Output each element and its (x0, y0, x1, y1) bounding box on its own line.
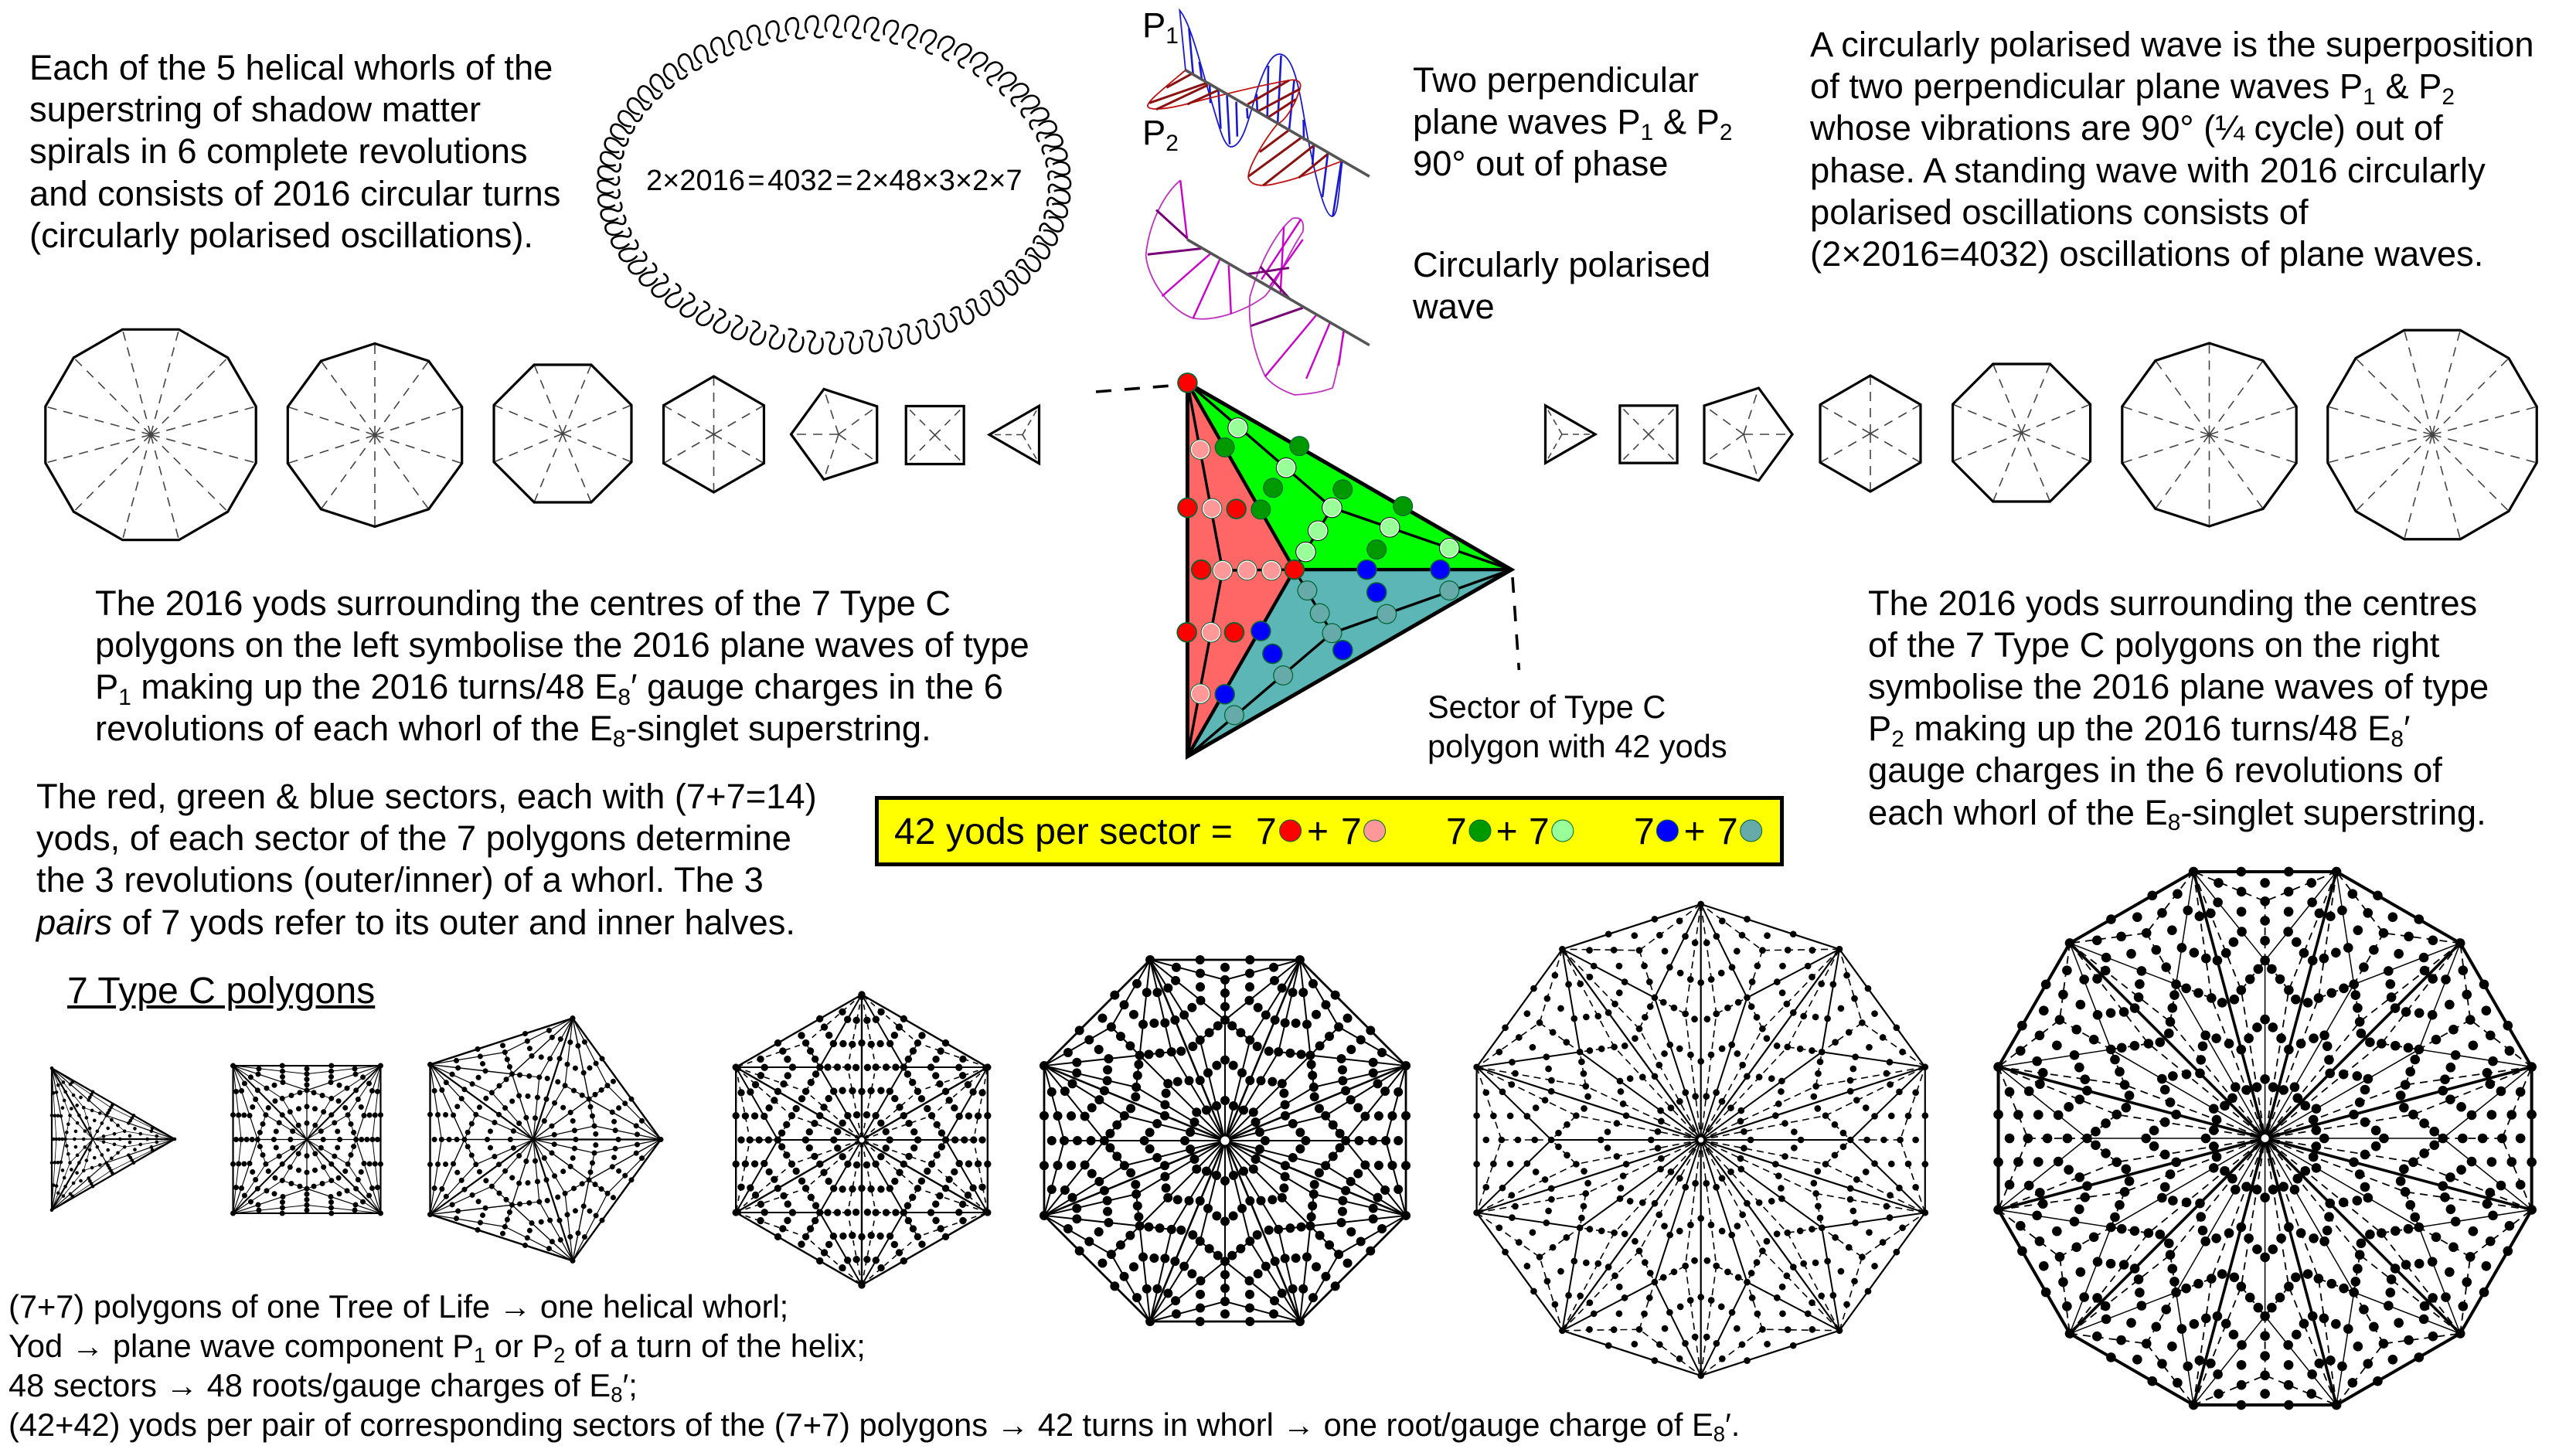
dashed leader lines (1096, 386, 1519, 670)
text: sector caption (1428, 689, 1727, 764)
centre: decagon (1698, 1138, 1703, 1142)
text: circularly polarised wave (1413, 245, 1710, 326)
yod polygon: decagon (1477, 904, 1925, 1376)
text: right polygons symbolise P2: P2 making up the 2016 turns/48 E8′ (1868, 709, 2411, 752)
text: helical whorl description: spirals in 6 complete revolutions (29, 131, 528, 171)
text: helical whorl description: superstring of shadow matter (29, 90, 481, 129)
yods: light green (1238, 428, 1449, 552)
polygon: hexagon left (664, 376, 764, 492)
text: superposition explanation: phase. A standing wave with 2016 circularly (1810, 151, 2486, 190)
text: red green blue sectors: The red, green & blue sectors, each with (7+7=14) (36, 777, 817, 816)
polygon: square right (1620, 406, 1677, 463)
yod polygon: hexagon (736, 995, 988, 1285)
text: circularly polarised wave: Circularly polarised (1413, 245, 1710, 284)
polygon: triangle right (1546, 406, 1595, 463)
text: bottom correspondence notes: (7+7) polygons of one Tree of Life → one helical whorl; (9, 1288, 788, 1325)
yods: blue (1225, 570, 1440, 694)
yellow legend box: + (1496, 811, 1518, 852)
polygon: decagon left (288, 343, 462, 527)
yod polygon: pentagon (430, 1019, 661, 1260)
text: sector caption: Sector of Type C (1428, 689, 1666, 725)
yellow legend box: 7 (1256, 811, 1277, 852)
text: superposition explanation: whose vibrations are 90° (¼ cycle) out of (1810, 108, 2443, 148)
text: helical whorl description (29, 48, 560, 255)
text: right polygons symbolise P2: gauge charges in the 6 revolutions of (1868, 750, 2442, 790)
yods: red (1187, 383, 1295, 632)
centre: hexagon (859, 1138, 864, 1142)
text: helical whorl description: (circularly polarised oscillations). (29, 216, 533, 255)
yods: green (1225, 446, 1403, 549)
text: superposition explanation (1810, 25, 2534, 274)
text: superposition explanation: polarised oscillations consists of (1810, 192, 2309, 232)
text: helical whorl description: and consists of 2016 circular turns (29, 174, 560, 213)
polygon: octagon right (1953, 364, 2091, 502)
centre: dodecagon (2261, 1134, 2269, 1142)
yellow legend box: 7 (1529, 811, 1550, 852)
text: bottom correspondence notes (9, 1288, 1740, 1446)
polygon: octagon left (494, 365, 631, 502)
yellow legend box: + (1684, 811, 1706, 852)
ring equation: 2×2016 = 4032 = 2×48×3×2×7 (646, 165, 1023, 197)
yod polygon: dodecagon (1999, 872, 2532, 1405)
yellow legend box: + (1307, 811, 1329, 852)
text: superposition explanation: of two perpendicular plane waves P1 & P2 (1810, 66, 2455, 110)
polygon: triangle left (989, 406, 1039, 464)
text: two perpendicular plane waves (1413, 60, 1732, 183)
text: two perpendicular plane waves: 90° out of phase (1413, 144, 1668, 183)
polygon: dodecagon left (46, 329, 256, 540)
text: two perpendicular plane waves: Two perpendicular (1413, 60, 1699, 100)
yellow legend box: 7 (1717, 811, 1738, 852)
text: right polygons symbolise P2: The 2016 yods surrounding the centres (1868, 583, 2477, 623)
polygon: decagon right (2122, 343, 2296, 526)
yod polygon: square (233, 1066, 380, 1213)
text: helical whorl description: Each of the 5 helical whorls of the (29, 48, 553, 87)
yellow legend box (876, 798, 1782, 864)
text: superposition explanation: (2×2016=4032) oscillations of plane waves. (1810, 234, 2483, 274)
yellow legend box: 7 (1634, 811, 1655, 852)
label: P2: P2 (1142, 113, 1179, 156)
heading: 7 Type C polygons: 7 Type C polygons (67, 970, 375, 1012)
plane waves P1 and P2 (1148, 10, 1370, 216)
polygon: hexagon right (1820, 376, 1921, 492)
yod polygon: octagon (1044, 960, 1406, 1321)
text: right polygons symbolise P2 (1868, 583, 2489, 835)
text: sector caption: polygon with 42 yods (1428, 728, 1727, 764)
text: right polygons symbolise P2: each whorl of the E8-singlet superstring. (1868, 793, 2486, 835)
text: bottom correspondence notes: (42+42) yods per pair of corresponding sectors of the (7+7) polygons → 42 turns in whorl → one root/gauge charge of E8′. (9, 1406, 1740, 1446)
yellow legend box: 42 yods per sector = (894, 811, 1233, 852)
text: circularly polarised wave: wave (1413, 287, 1495, 326)
yellow legend box: 7 (1341, 811, 1362, 852)
text: red green blue sectors: pairs of 7 yods refer to its outer and inner halves. (36, 903, 795, 942)
yellow legend box: 7 (1446, 811, 1467, 852)
text: left polygons symbolise P1: The 2016 yods surrounding the centres of the 7 Type C (95, 583, 951, 623)
coloured sector of Type C polygon (1187, 383, 1512, 757)
text: left polygons symbolise P1: revolutions of each whorl of the E8-singlet superstring. (95, 709, 931, 752)
polygon: dodecagon right (2328, 330, 2537, 539)
text: bottom correspondence notes: 48 sectors → 48 roots/gauge charges of E8′; (9, 1367, 638, 1406)
label: P1: P1 (1142, 5, 1179, 49)
text: left polygons symbolise P1: polygons on the left symbolise the 2016 plane waves of type (95, 625, 1029, 665)
circularly polarised wave (1146, 180, 1370, 395)
text: red green blue sectors (36, 777, 817, 942)
text: right polygons symbolise P2: symbolise the 2016 plane waves of type (1868, 667, 2489, 706)
text: red green blue sectors: the 3 revolutions (outer/inner) of a whorl. The 3 (36, 860, 764, 900)
polygon: square left (906, 406, 964, 464)
polygon: pentagon left (791, 389, 877, 479)
text: left polygons symbolise P1: P1 making up the 2016 turns/48 E8′ gauge charges in the 6 (95, 667, 1003, 710)
text: bottom correspondence notes: Yod → plane wave component P1 or P2 of a turn of the helix; (9, 1328, 866, 1367)
yod polygon: triangle (32, 1068, 175, 1210)
top right row of 7 polygons (1546, 330, 2537, 539)
centre: octagon (1221, 1136, 1229, 1145)
text: right polygons symbolise P2: of the 7 Type C polygons on the right (1868, 625, 2440, 665)
top left row of 7 polygons (46, 329, 1040, 540)
text: two perpendicular plane waves: plane waves P1 & P2 (1413, 102, 1732, 145)
text: left polygons symbolise P1 (95, 583, 1029, 752)
helical whorl ring (597, 15, 1070, 354)
polygon: pentagon right (1704, 388, 1792, 481)
yods: teal (1234, 590, 1449, 715)
yods: pink (1200, 450, 1271, 694)
text: red green blue sectors: yods, of each sector of the 7 polygons determine (36, 818, 791, 858)
text: superposition explanation: A circularly polarised wave is the superposition (1810, 25, 2534, 64)
